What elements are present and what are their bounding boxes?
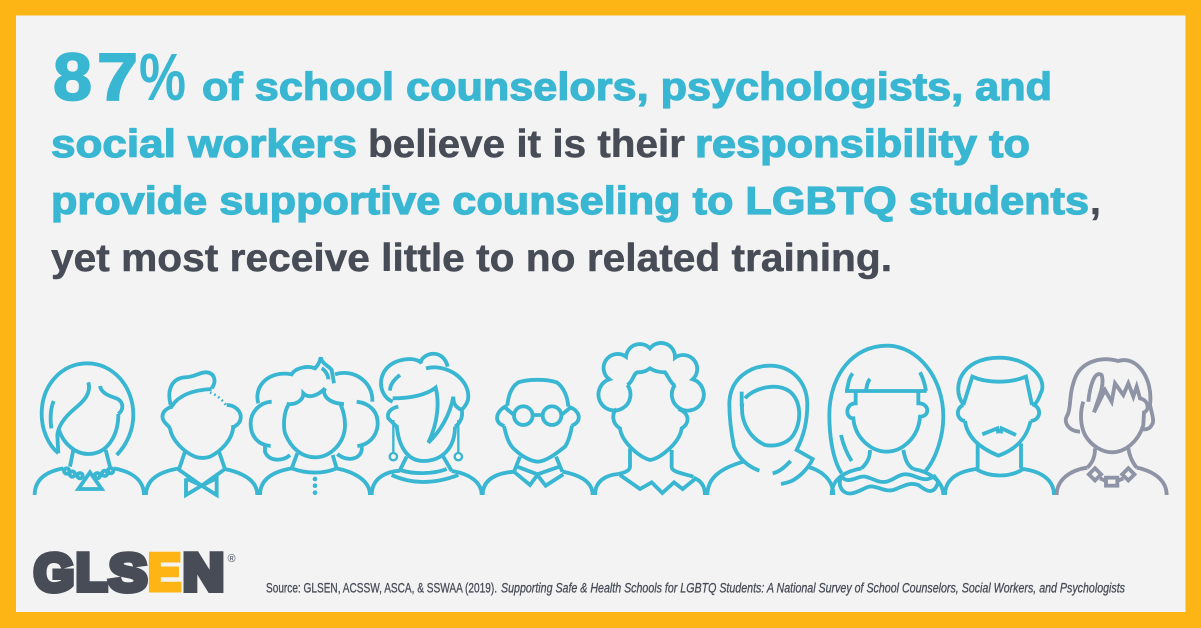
icon: person with long hair and fringe: [829, 346, 943, 495]
headline line 4: yet most receive little to no related training.: [51, 237, 892, 280]
icon: person with quiff and bow tie: [146, 372, 257, 495]
headline line 2: social workers: [51, 123, 357, 166]
statistic: 87%: [53, 40, 186, 115]
source citation: [266, 580, 1125, 596]
icon: person with moustache: [945, 358, 1054, 495]
logo: GLSEN: G: [34, 544, 74, 602]
headline statement: [51, 40, 1101, 280]
statistic: 87%: 8: [53, 40, 92, 115]
icon: person wearing hijab: [707, 366, 833, 495]
logo: GLSEN: S: [109, 544, 147, 602]
icon: person with curly hair and buttons: [251, 357, 378, 495]
headline line 2: believe it is their: [368, 123, 685, 166]
statistic: 87%: %: [139, 40, 186, 115]
icon: grey person with spiky fringe and chain: [1057, 359, 1167, 495]
row of people icons: [35, 343, 1167, 495]
icon: person with round glasses: [483, 380, 593, 495]
icon: person with bob and triangle necklace: [35, 363, 144, 495]
logo: GLSEN: N: [183, 544, 224, 602]
logo: GLSEN: [34, 544, 236, 602]
logo: GLSEN: E: [148, 544, 181, 602]
headline line 3: provide supportive counseling to LGBTQ students: [51, 180, 1089, 223]
headline line 2: responsibility to: [695, 123, 1030, 166]
headline line 3: ,: [1090, 180, 1101, 223]
source citation: Source: GLSEN, ACSSW, ASCA, & SSWAA (2019).: [266, 580, 497, 596]
headline line 1: of school counselors, psychologists, and: [202, 66, 1052, 109]
headline line 2: [51, 123, 1030, 166]
icon: person with afro and zigzag collar: [595, 343, 705, 495]
icon: person with bun and earrings: [372, 354, 482, 495]
logo: GLSEN: L: [76, 544, 107, 602]
logo: GLSEN: ®: [228, 553, 236, 565]
statistic: 87%: 7: [97, 40, 138, 115]
